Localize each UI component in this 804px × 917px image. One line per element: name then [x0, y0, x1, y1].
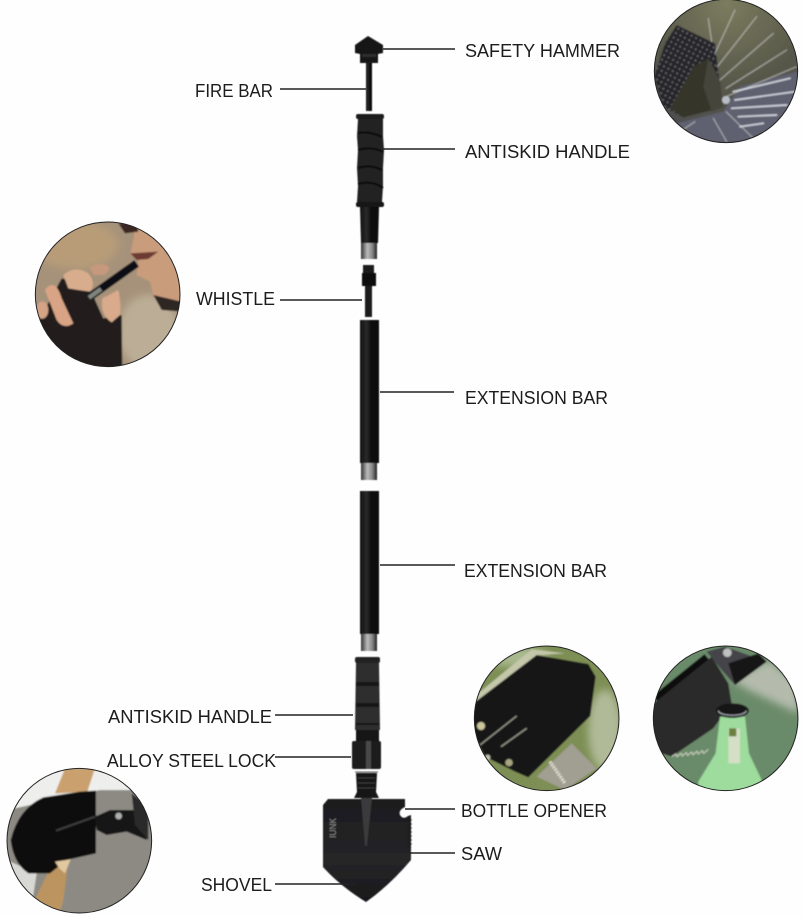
- label: bottle opener: BOTTLE OPENER: [461, 801, 607, 821]
- extension bar upper: [360, 320, 379, 480]
- label: whistle: WHISTLE: [196, 289, 275, 309]
- saw photo ring: [474, 646, 619, 791]
- label: fire bar: FIRE BAR: [195, 81, 273, 101]
- label: safety hammer: SAFETY HAMMER: [465, 41, 620, 61]
- label: saw: SAW: [461, 844, 502, 864]
- leader lines: [275, 49, 455, 884]
- bottle photo ring: [653, 646, 798, 791]
- photo: whistle in use: [32, 218, 185, 372]
- wood photo ring: [7, 768, 152, 913]
- shovel assembly: [323, 36, 411, 902]
- label: extension bar upper: EXTENSION BAR: [465, 388, 608, 408]
- label: extension bar lower: EXTENSION BAR: [464, 561, 607, 581]
- label: shovel: SHOVEL: [201, 875, 272, 895]
- photo: bottle opener: [652, 643, 802, 797]
- whistle photo ring: [35, 222, 180, 367]
- lower antiskid handle: [355, 657, 380, 741]
- label: antiskid handle lower: ANTISKID HANDLE: [108, 707, 272, 727]
- photo: hammer breaking glass: [650, 0, 803, 143]
- shovel blade: [323, 798, 411, 902]
- hammer photo ring: [654, 0, 798, 143]
- photo: chopping wood: [7, 767, 157, 917]
- whistle: [362, 265, 376, 317]
- label: alloy steel lock: ALLOY STEEL LOCK: [107, 751, 276, 771]
- labels: [107, 41, 630, 895]
- shovel logo: IUNK: [328, 818, 338, 838]
- fire bar: [366, 63, 372, 111]
- photo: saw cutting branch: [472, 643, 625, 797]
- extension bar lower: [360, 491, 379, 651]
- upper antiskid handle: [356, 114, 384, 259]
- safety hammer: [355, 36, 383, 63]
- label: antiskid handle upper: ANTISKID HANDLE: [465, 142, 630, 162]
- alloy steel lock: [352, 741, 381, 798]
